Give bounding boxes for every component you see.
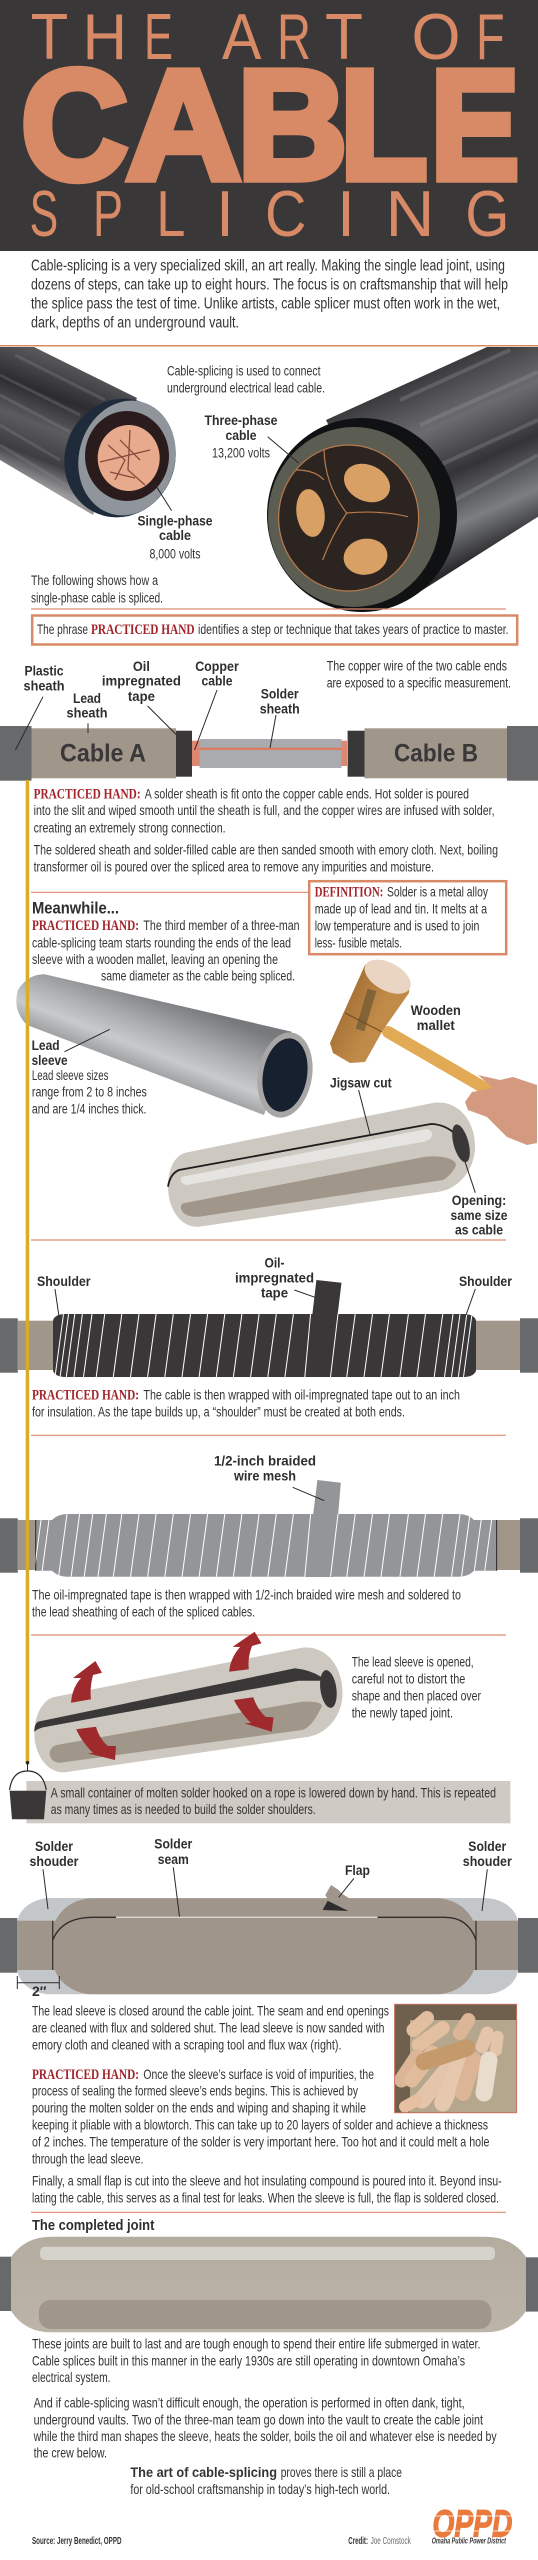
heading: the completed joint: The completed joint [32,2218,155,2234]
text: third member rounds sleeve: sleeve with a wooden mallet, leaving an opening the [32,951,278,967]
text: practiced hand solder sheath: PRACTICED HAND: [34,786,141,802]
text: third member rounds sleeve: The third member of a three-man [143,917,300,933]
text: sleeve opened: the newly taped joint. [352,1705,453,1720]
callout: solder definition: Solder is a metal alloy [387,884,488,900]
labels: closed sleeve parts: shouder [30,1854,79,1869]
labels: tape and shoulders: tape [261,1285,288,1300]
labels: closed sleeve parts: Flap [345,1863,370,1878]
label: opening same size as cable: same size [450,1208,508,1223]
title word: CABLE: B [237,39,347,213]
diagram: opened lead sleeve [34,1632,343,1772]
labels: tape and shoulders [37,1256,513,1317]
dimension: 2 inches [17,1976,59,1999]
labels: closed sleeve parts: seam [158,1852,189,1867]
labels: cable parts: Oil [133,659,150,674]
callout: solder definition: less- fusible metals. [315,934,402,950]
text: copper wire exposed [327,659,511,691]
text: practiced hand sealing: through the lead sleeve. [32,2150,143,2166]
diagram: sleeve with jigsaw cut [168,1102,475,1227]
label: lead sleeve: range from 2 to 8 inches [32,1085,147,1100]
label: wooden mallet: mallet [417,1018,455,1033]
text: following steps intro [31,573,163,605]
text: practiced hand sealing [32,2066,502,2205]
source credit: Source: Jerry Benedict, OPPD [32,2536,122,2547]
title line: THE ART OF: E [144,0,173,73]
labels: cable parts: sheath [260,701,300,716]
text: joints built to last: electrical system. [32,2369,110,2385]
text: joints built to last [32,2336,480,2385]
text: practiced hand sealing: Once the sleeve’s surface is void of impurities, the [143,2066,374,2082]
label: lead sleeve: Lead sleeve sizes [32,1068,109,1083]
title line: THE ART OF: T [31,0,68,73]
intro paragraph: dark, depths of an underground vault. [31,314,239,331]
labels: cable parts [15,659,300,750]
text: practiced hand solder sheath: creating an extremely strong connection. [34,819,226,835]
text: conclusion: The art of cable-splicing [130,2464,277,2480]
text: third member rounds sleeve: PRACTICED HAND: [32,918,139,934]
photo: three-phase cable [267,347,538,612]
label: braided wire mesh: 1/2-inch braided [214,1453,316,1468]
text: practiced hand tape: PRACTICED HAND: [32,1387,139,1403]
callout: practiced hand definition: PRACTICED HAND [91,622,195,638]
callout: solder definition: low temperature and is used to join [315,917,479,933]
title line: SPLICING: G [465,177,509,250]
text: wire mesh step [32,1586,461,1620]
text: sleeve opened [352,1655,481,1720]
title line: SPLICING: S [30,177,58,250]
label: lead sleeve [32,1029,147,1116]
label: opening same size as cable: as cable [455,1222,503,1237]
title word: CABLE: C [21,39,128,213]
labels: cable parts: sheath [24,678,64,693]
title line: SPLICING: C [265,177,306,250]
text: sleeve opened: The lead sleeve is opened, [352,1655,474,1670]
callout: solder definition [309,881,506,954]
callout: solder definition: made up of lead and tin. It melts at a [315,900,487,916]
diagram: braided wire mesh wrap [0,1480,538,1577]
panel: molten solder note [26,1781,510,1823]
photo credit: Joe Comstock [371,2536,411,2547]
diagram: closed sleeve with solder shoulders [0,1885,538,1999]
title line: THE ART OF: R [277,0,311,73]
label: three-phase cable [204,413,299,463]
title line: SPLICING: L [156,177,185,250]
labels: cable parts: impregnated [102,674,181,689]
photo: solder sticks [395,2004,517,2113]
labels: closed sleeve parts [30,1837,512,1917]
title line: THE ART OF: T [325,0,363,73]
title line: SPLICING: N [386,177,434,250]
label: single-phase cable [138,483,213,561]
label: jigsaw cut: Jigsaw cut [330,1075,392,1090]
title line: THE ART OF: F [476,0,505,73]
title line: THE ART OF: H [82,0,127,73]
text: sleeve closed: The lead sleeve is closed around the cable joint. The seam and end openings [32,2003,389,2019]
text: third member rounds sleeve: same diameter as the cable being spliced. [101,968,295,984]
text: sleeve opened: careful not to distort the [352,1671,465,1686]
text: practiced hand solder sheath [34,785,498,874]
labels: closed sleeve parts: Solder [468,1839,507,1854]
label: single-phase cable: Single-phase [138,514,213,529]
text: underground vaults: the crew below. [34,2445,107,2461]
photo: single-phase cable [0,347,193,534]
title line: THE ART OF [31,0,505,73]
icon: solder bucket [10,1761,46,1819]
title line: THE ART OF: A [222,0,262,73]
text: following steps intro: The following shows how a [31,573,158,588]
label: opening same size as cable [450,1162,508,1237]
label: braided wire mesh: wire mesh [233,1469,296,1484]
labels: cable parts: Plastic [24,664,64,679]
arrows: sleeve opening directions [71,1632,274,1760]
title banner [0,0,538,251]
callout: practiced hand definition [32,616,517,644]
labels: tape and shoulders: Oil- [264,1256,284,1271]
title line: SPLICING: P [93,177,123,250]
labels: tape and shoulders: Shoulder [459,1274,513,1289]
labels: closed sleeve parts: shouder [463,1854,512,1869]
text: sleeve closed: are cleaned with flux and soldered shut. The lead sleeve is now sanded with [32,2020,384,2036]
title line: THE ART OF: O [412,0,460,73]
cable B label: Cable B [394,740,478,768]
text: sleeve closed: emory cloth and cleaned with a scraping tool and flux wax (right). [32,2036,342,2052]
text: wire mesh step: the lead sheathing of each of the spliced cables. [32,1604,255,1620]
label: three-phase cable: cable [226,428,257,443]
heading: meanwhile: Meanwhile... [32,899,119,917]
text: practiced hand sealing: process of sealing the formed sleeve’s ends begins. This is achieved by [32,2083,358,2099]
text: sleeve closed [32,2003,389,2052]
labels: tape and shoulders: impregnated [235,1271,314,1286]
labels: closed sleeve parts: Solder [154,1837,193,1852]
label: lead sleeve: sleeve [32,1053,68,1068]
label: lead sleeve: Lead [32,1038,60,1053]
title line: SPLICING: I [337,177,355,250]
text: practiced hand sealing: pouring the molten solder on the ends and wiping and shaping it while [32,2100,366,2116]
text: third member rounds sleeve: cable-splicing team starts rounding the ends of the lead [32,934,291,950]
text: practiced hand sealing: PRACTICED HAND: [32,2067,139,2083]
panel: molten solder note: as many times as is needed to build the solder shoulders. [51,1801,316,1817]
labels: cable parts: Lead [73,691,101,706]
labels: cable parts: tape [128,689,155,704]
diagram: completed joint [0,2237,538,2332]
label: single-phase cable: 8,000 volts [150,546,201,561]
title line: SPLICING: I [216,177,234,250]
label: single-phase cable: cable [159,528,191,543]
label: three-phase cable: 13,200 volts [212,446,270,461]
yellow rope line [26,780,29,1762]
text: third member rounds sleeve [32,917,300,984]
caption: cable-splicing use: Cable-splicing is used to connect [167,364,321,379]
title word: CABLE: A [126,39,241,213]
diagram: cables A and B with solder sheath [0,726,538,781]
text: underground vaults [33,2394,497,2461]
labels: cable parts: Solder [261,686,299,701]
callout: solder definition: DEFINITION: [315,885,383,901]
label: wooden mallet [411,1003,461,1033]
labels: cable parts: Copper [195,659,239,674]
title word: CABLE: E [431,39,519,213]
title word: CABLE: L [340,39,428,213]
diagram: oil-impregnated tape wrap [0,1280,538,1377]
label: wooden mallet: Wooden [411,1003,461,1018]
text: sleeve opened: shape and then placed over [352,1689,481,1704]
label: opening same size as cable: Opening: [452,1193,506,1208]
photo: wooden mallet and hand [330,953,537,1145]
photo credit: Credit: [348,2536,368,2547]
label: braided wire mesh [214,1453,324,1501]
labels: cable parts: sheath [66,706,108,721]
flap [323,1885,353,1911]
cable A label: Cable A [60,740,146,768]
label: three-phase cable: Three-phase [204,413,278,428]
caption: cable-splicing use: underground electrical lead cable. [167,380,325,395]
logo: OPPD: OPPD [432,2504,512,2546]
text: practiced hand tape [32,1386,460,1420]
text: conclusion: for old-school craftsmanship in today’s high-tech world. [130,2481,390,2497]
label: lead sleeve: and are 1/4 inches thick. [32,1101,146,1116]
caption: cable-splicing use [167,364,325,395]
dimension: 2 inches: 2″ [32,1983,47,1999]
intro paragraph [31,258,508,331]
photo: lead sleeve pipe [16,974,319,1122]
text: conclusion [130,2464,402,2497]
labels: closed sleeve parts: Solder [35,1839,74,1854]
callout: practiced hand definition: The phrase [37,621,88,637]
text: practiced hand tape: for insulation. As the tape builds up, a “shoulder” must be created at both ends. [32,1404,405,1420]
labels: tape and shoulders: Shoulder [37,1274,91,1289]
text: following steps intro: single-phase cable is spliced. [31,590,163,605]
label: jigsaw cut [330,1075,392,1134]
labels: cable parts: cable [202,674,233,689]
text: conclusion: proves there is still a place [281,2464,402,2480]
